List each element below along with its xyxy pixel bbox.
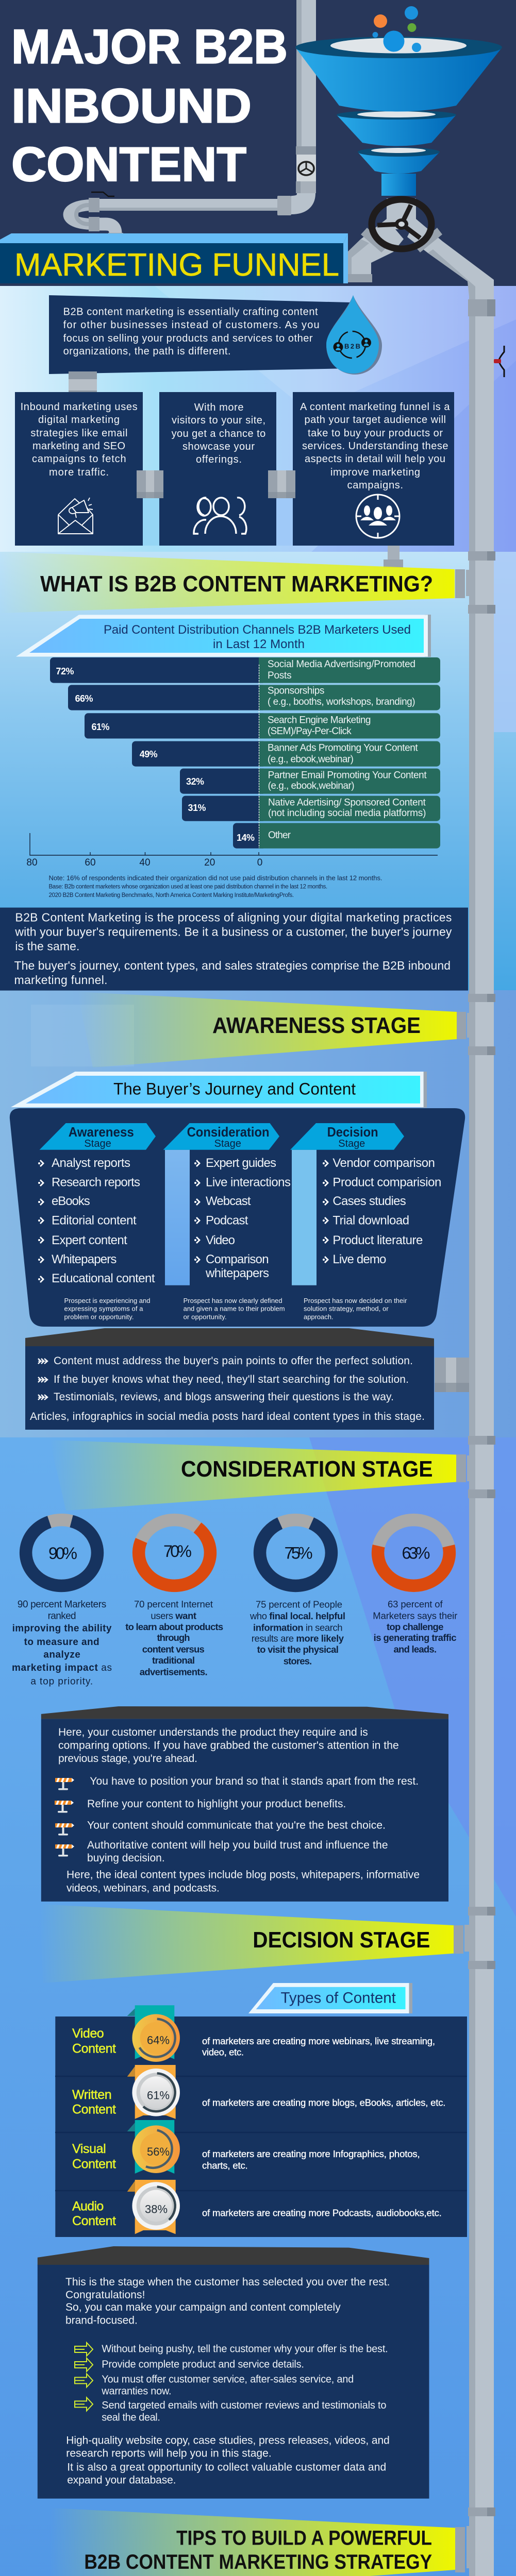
stat text: 90 percent: to measure and: [24, 1637, 99, 1648]
panel: decision notes: seal the deal.: [102, 2412, 160, 2423]
bar chart: Sponsorships: [268, 686, 324, 697]
heading band: consideration stage: [49, 1440, 475, 1511]
icon: envelope megaphone: [58, 498, 93, 534]
stat text: 75 percent: who final local. helpful: [249, 1611, 345, 1621]
row: audio content: of marketers are creating more Podcasts, audiobooks,etc.: [202, 2207, 442, 2218]
panel: awareness notes: [25, 1328, 434, 1430]
panel: definition: [0, 908, 468, 991]
pipe connector: intro to boxes: [69, 371, 97, 399]
decision column: Vendor comparison: [332, 1156, 435, 1170]
marketing funnel heading band: MARKETING FUNNEL: [14, 247, 339, 283]
stat text: 90 percent: analyze: [43, 1650, 80, 1660]
bar chart: 14%: [237, 833, 255, 843]
intro panel: [49, 295, 351, 374]
heading band: consideration stage: CONSIDERATION STAGE: [181, 1456, 433, 1482]
decision column: [290, 1123, 441, 1321]
awareness column: Analyst reports: [52, 1156, 130, 1170]
heading band: decision stage: DECISION STAGE: [253, 1927, 430, 1953]
panel: awareness notes: Articles, infographics in social media posts hard ideal content types in this stage.: [30, 1411, 425, 1422]
stat text: 75 percent: to visit the physical: [257, 1644, 339, 1655]
red valve: [494, 346, 504, 377]
panel: definition: with your buyer's requirements. Be it a business or a customer, the buyer's journey: [14, 925, 452, 939]
decision column: Live demo: [332, 1252, 386, 1266]
main title: MAJOR B2B: [11, 20, 288, 73]
row: visual content: 56%: [147, 2145, 170, 2158]
bar chart: 31%: [188, 803, 206, 813]
stat text: 75 percent: results are more likely: [252, 1633, 344, 1643]
stat text: 90 percent: ranked: [48, 1611, 76, 1621]
funnel valve wheel: [372, 199, 431, 249]
bar chart: 66%: [75, 693, 93, 704]
panel: more visitors: offerings.: [196, 454, 242, 465]
decision column: Product comparision: [332, 1176, 441, 1190]
panel: decision notes: So, you can make your campaign and content completely: [65, 2301, 341, 2313]
pipe connectors between boxes: [137, 470, 403, 568]
icon: water drop B2B: [326, 295, 382, 375]
panel: decision notes: Congratulations!: [65, 2289, 145, 2301]
panel: decision notes: expand your database.: [67, 2474, 176, 2486]
donut chart: 70%: 70%: [163, 1542, 192, 1561]
panel: definition: B2B Content Marketing is the process of aligning your digital marketing practices: [15, 910, 452, 924]
stat text: 63 percent: and leads.: [394, 1643, 437, 1655]
panel: content funnel definition: [293, 392, 454, 546]
buyer's journey banner: The Buyer’s Journey and Content: [113, 1080, 356, 1098]
panel: decision notes: [38, 2246, 429, 2499]
panel: decision notes: warranties now.: [101, 2385, 172, 2397]
bar chart: (not including social media platforms): [268, 808, 426, 819]
bar chart: 80: [26, 857, 38, 868]
bar chart: Social Media Advertising/Promoted: [268, 659, 415, 670]
awareness column: Research reports: [52, 1176, 140, 1190]
awareness column: expressing symptoms of a: [64, 1305, 143, 1313]
panel: decision notes: It is also a great opportunity to collect valuable customer data and: [67, 2461, 386, 2473]
stat text: 75 percent: 75 percent of People: [256, 1599, 342, 1610]
stat text: 90 percent: improving the ability: [12, 1623, 112, 1634]
stat text: 70 percent: advertisements.: [140, 1666, 208, 1677]
consideration column: and given a name to their problem: [184, 1305, 285, 1313]
panel: more visitors: visitors to your site,: [172, 415, 265, 426]
main title: CONTENT: [11, 137, 246, 191]
heading band: tips: B2B CONTENT MARKETING STRATEGY: [84, 2551, 432, 2573]
heading band: decision stage: [40, 1904, 472, 1983]
consideration column: [163, 1123, 291, 1321]
panel: content funnel definition: aspects in detail will help you: [305, 453, 445, 465]
panel: consideration notes: Authoritative content will help you build trust and influence the: [87, 1839, 388, 1851]
bar chart: Posts: [268, 670, 292, 681]
panel: awareness notes: Testimonials, reviews, and blogs answering their questions is the way.: [54, 1391, 394, 1403]
stat text: 75 percent: [249, 1599, 345, 1666]
stat text: 70 percent: traditional: [152, 1655, 195, 1666]
decision column: Trial download: [332, 1214, 409, 1228]
panel: consideration notes: previous stage, you're ahead.: [58, 1753, 197, 1765]
panel: consideration notes: buying decision.: [87, 1852, 165, 1864]
stat text: 70 percent: [125, 1599, 223, 1677]
consideration column: Webcast: [206, 1194, 251, 1208]
panel: decision notes: research reports will help you in this stage.: [66, 2448, 272, 2460]
stat text: 70 percent: content versus: [142, 1643, 205, 1655]
icon: people: [194, 498, 246, 534]
row: visual content: [72, 2120, 420, 2174]
chart note: Note: 16% of respondents indicated their organization did not use paid distribution channels in the last 12 months.: [48, 874, 382, 882]
awareness column: Stage: [84, 1138, 111, 1149]
row: written content: 61%: [147, 2089, 170, 2102]
panel: definition: marketing funnel.: [14, 973, 107, 987]
heading band: what is b2b content marketing: [0, 552, 472, 613]
consideration column: Prospect has now clearly defined: [184, 1297, 282, 1304]
consideration column: Podcast: [206, 1214, 248, 1228]
stat text: 63 percent: top challenge: [387, 1621, 443, 1632]
consideration column: whitepapers: [205, 1266, 269, 1280]
icon: target audience: [356, 495, 400, 538]
intro panel: focus on selling your products and services to other: [63, 333, 313, 344]
row: written content: Content: [72, 2103, 116, 2117]
panel: inbound marketing: campaigns to fetch: [32, 453, 126, 465]
chart heading banner: in Last 12 Month: [213, 637, 305, 651]
stat text: 70 percent: users want: [151, 1610, 196, 1621]
panel: more visitors: you get a chance to: [172, 428, 265, 439]
awareness column: Prospect is experiencing and: [64, 1297, 151, 1304]
bar chart: 49%: [140, 749, 158, 759]
bar chart: 61%: [92, 722, 109, 732]
panel: inbound marketing: marketing and SEO: [32, 440, 125, 452]
panel: decision notes: brand-focused.: [65, 2315, 138, 2327]
icon: water drop B2B: B2B: [344, 343, 360, 350]
panel: more visitors: With more: [194, 402, 243, 413]
bar chart: Partner Email Promoting Your Content: [268, 770, 427, 781]
chart note: Base: B2b content marketers whose organization used at least one paid distribution channel in the last 12 months.: [48, 884, 327, 890]
types of content banner: Types of Content: [280, 1989, 396, 2006]
marketing funnel heading band: [0, 233, 348, 283]
row: written content: [72, 2065, 445, 2119]
panel: buyer's journey stages: [10, 1108, 465, 1327]
awareness column: Editorial content: [52, 1214, 137, 1228]
bar chart: Search Engine Marketing: [268, 715, 371, 725]
panel: types of content: [55, 2005, 467, 2237]
consideration column: Live interactions: [206, 1176, 291, 1190]
consideration column: or opportunity.: [184, 1313, 227, 1321]
awareness column: Educational content: [52, 1272, 155, 1285]
heading band: tips: TIPS TO BUILD A POWERFUL: [176, 2527, 432, 2550]
funnel illustration: [295, 6, 502, 196]
stat text: 90 percent: a top priority.: [30, 1676, 93, 1687]
stat text: 70 percent: 70 percent Internet: [134, 1599, 213, 1609]
bar chart: 60: [85, 857, 96, 868]
panel: consideration notes: videos, webinars, and podcasts.: [66, 1883, 220, 1894]
bar chart: 20: [204, 857, 215, 868]
stat text: 75 percent: stores.: [284, 1656, 312, 1666]
row: written content: of marketers are creating more blogs, eBooks, articles, etc.: [202, 2097, 445, 2108]
stat text: 63 percent: is generating traffic: [374, 1632, 457, 1643]
bar chart: [26, 657, 440, 868]
funnel pipes under the spout: [344, 198, 494, 296]
awareness column: problem or opportunity.: [64, 1313, 134, 1321]
panel: inbound marketing: [15, 392, 143, 546]
awareness column: [38, 1123, 156, 1321]
panel: content funnel definition: path your target audience will: [304, 414, 446, 426]
stat text: 90 percent: 90 percent Marketers: [18, 1599, 106, 1610]
decision column: Cases studies: [332, 1194, 406, 1208]
intro panel: B2B content marketing is essentially crafting content: [63, 307, 318, 318]
panel: decision notes: This is the stage when the customer has selected you over the rest.: [65, 2276, 390, 2288]
row: written content: Written: [72, 2088, 112, 2102]
stat text: 70 percent: to learn about products: [125, 1621, 223, 1632]
bar chart: Native Adertising/ Sponsored Content: [268, 798, 426, 808]
stat text: 63 percent: 63 percent of: [388, 1599, 443, 1609]
consideration column: Video: [206, 1233, 235, 1247]
panel: decision notes: Without being pushy, tell the customer why your offer is the best.: [102, 2344, 388, 2355]
panel: awareness notes: Content must address the buyer's pain points to offer the perfect solution.: [54, 1355, 413, 1367]
awareness column: eBooks: [52, 1194, 90, 1208]
panel: content funnel definition: services. Understanding these: [302, 440, 448, 452]
chart heading banner: Paid Content Distribution Channels B2B Marketers Used: [104, 623, 411, 637]
awareness column: Whitepapers: [52, 1252, 116, 1266]
panel: decision notes: Send targeted emails with customer reviews and testimonials to: [102, 2400, 387, 2411]
pipe connector: awareness panel to main pipe: [435, 1358, 469, 1392]
panel: definition: is the same.: [15, 940, 79, 953]
bar chart: ( e.g., booths, workshops, branding): [268, 697, 415, 707]
intro panel: for other businesses instead of customers. As you: [63, 319, 320, 331]
donut chart: 75%: [260, 1520, 331, 1586]
donut chart: 63%: [378, 1520, 450, 1586]
awareness column: Expert content: [52, 1233, 127, 1247]
panel: decision notes: Provide complete product and service details.: [102, 2359, 304, 2370]
panel: inbound marketing: strategies like email: [30, 428, 127, 439]
pipe network and valve at top: [69, 0, 316, 239]
bar chart: Banner Ads Promoting Your Content: [268, 743, 418, 754]
panel: more visitors: showcase your: [182, 441, 255, 452]
panel: content funnel definition: campaigns.: [347, 480, 403, 491]
panel: content funnel definition: improve marketing: [330, 467, 420, 478]
row: video content: of marketers are creating more webinars, live streaming,: [202, 2036, 435, 2046]
panel: decision notes: High-quality website copy, case studies, press releases, videos, and: [66, 2435, 390, 2447]
donut chart: 63%: 63%: [402, 1544, 430, 1562]
stat text: 63 percent: [373, 1599, 457, 1655]
row: visual content: charts, etc.: [202, 2160, 248, 2171]
consideration column: Comparison: [206, 1252, 269, 1266]
row: visual content: Content: [72, 2157, 116, 2171]
awareness column: Awareness: [69, 1124, 134, 1140]
panel: awareness notes: If the buyer knows what they need, they'll start searching for the solution.: [54, 1374, 409, 1385]
row: video content: Video: [72, 2026, 104, 2041]
stat text: 75 percent: information in search: [253, 1622, 343, 1633]
row: audio content: 38%: [145, 2203, 168, 2216]
panel: consideration notes: You have to position your brand so that it stands apart from the rest.: [90, 1775, 419, 1787]
bar chart: (e.g., ebook,webinar): [268, 781, 355, 791]
chart note: [48, 874, 382, 899]
row: visual content: of marketers are creating more Infographics, photos,: [202, 2148, 420, 2159]
decision column: Prospect has now decided on their: [304, 1297, 407, 1304]
bar chart: 40: [139, 857, 151, 868]
consideration column: Stage: [214, 1138, 241, 1149]
bar chart: 32%: [186, 776, 204, 787]
consideration column: Expert guides: [206, 1156, 276, 1170]
row: video content: 64%: [147, 2033, 170, 2046]
heading band: tips: [49, 2508, 474, 2576]
donut chart: 75%: 75%: [285, 1544, 313, 1562]
panel: inbound marketing: digital marketing: [38, 414, 120, 426]
panel: consideration notes: Here, your customer understands the product they require and is: [58, 1726, 368, 1738]
right main pipe: [468, 286, 495, 2576]
panel: content funnel definition: A content marketing funnel is a: [300, 401, 450, 413]
heading band: awareness stage: AWARENESS STAGE: [212, 1013, 421, 1038]
decision column: Product literature: [332, 1233, 423, 1247]
main title: [11, 20, 288, 191]
panel: inbound marketing: Inbound marketing uses: [21, 401, 138, 413]
types of content banner: [248, 1983, 412, 2013]
decision column: Decision: [327, 1124, 378, 1140]
bar chart: (SEM)/Pay-Per-Click: [268, 726, 352, 737]
bar chart: Other: [268, 830, 291, 841]
bar chart: (e.g., ebook,webinar): [268, 754, 354, 765]
chart heading banner: [16, 615, 431, 657]
row: audio content: Audio: [72, 2199, 104, 2213]
row: audio content: Content: [72, 2214, 116, 2228]
stat text: 90 percent: marketing impact as: [12, 1663, 112, 1673]
donut chart: 90%: 90%: [48, 1544, 77, 1563]
decision column: solution strategy, method, or: [304, 1305, 389, 1313]
intro panel: organizations, the path is different.: [63, 346, 231, 357]
panel: consideration notes: Your content should communicate that you're the best choice.: [87, 1820, 386, 1832]
row: video content: Content: [72, 2041, 116, 2056]
buyer's journey banner: [11, 1072, 427, 1108]
row: audio content: [72, 2180, 442, 2234]
chart note: 2020 B2B Content Marketing Benchmarks, North America Content Marking Institute/MarketingProfs.: [48, 892, 294, 899]
heading band: what is b2b content marketing: WHAT IS B2B CONTENT MARKETING?: [40, 571, 433, 597]
main title: INBOUND: [11, 78, 252, 133]
panel: more visitors: [159, 392, 276, 546]
panel: consideration notes: Here, the ideal content types include blog posts, whitepapers, informative: [66, 1869, 420, 1880]
consideration column: Consideration: [187, 1124, 270, 1140]
row: visual content: Visual: [72, 2142, 106, 2156]
panel: inbound marketing: more traffic.: [49, 467, 109, 478]
donut chart: 70%: [139, 1520, 210, 1586]
stat text: 70 percent: through: [157, 1632, 190, 1643]
row: video content: video, etc.: [202, 2046, 244, 2058]
stat text: 90 percent: [12, 1599, 112, 1687]
decision column: approach.: [304, 1313, 333, 1321]
row: video content: [72, 2005, 435, 2062]
panel: consideration notes: Refine your content to highlight your product benefits.: [87, 1798, 346, 1810]
panel: content funnel definition: take to buy your products or: [308, 428, 443, 439]
panel: consideration notes: comparing options. If you have grabbed the customer's attention in the: [58, 1739, 399, 1752]
decision column: Stage: [338, 1138, 365, 1149]
bar chart: 0: [257, 857, 262, 868]
heading band: awareness stage: [77, 992, 473, 1067]
panel: decision notes: You must offer customer service, after-sales service, and: [102, 2374, 354, 2385]
panel: definition: The buyer's journey, content types, and sales strategies comprise the B2B inbound: [14, 959, 451, 972]
donut chart: 90%: [26, 1520, 97, 1586]
stat text: 63 percent: Marketers says their: [373, 1610, 457, 1621]
bar chart: 72%: [56, 666, 74, 676]
panel: consideration notes: [41, 1706, 448, 1902]
